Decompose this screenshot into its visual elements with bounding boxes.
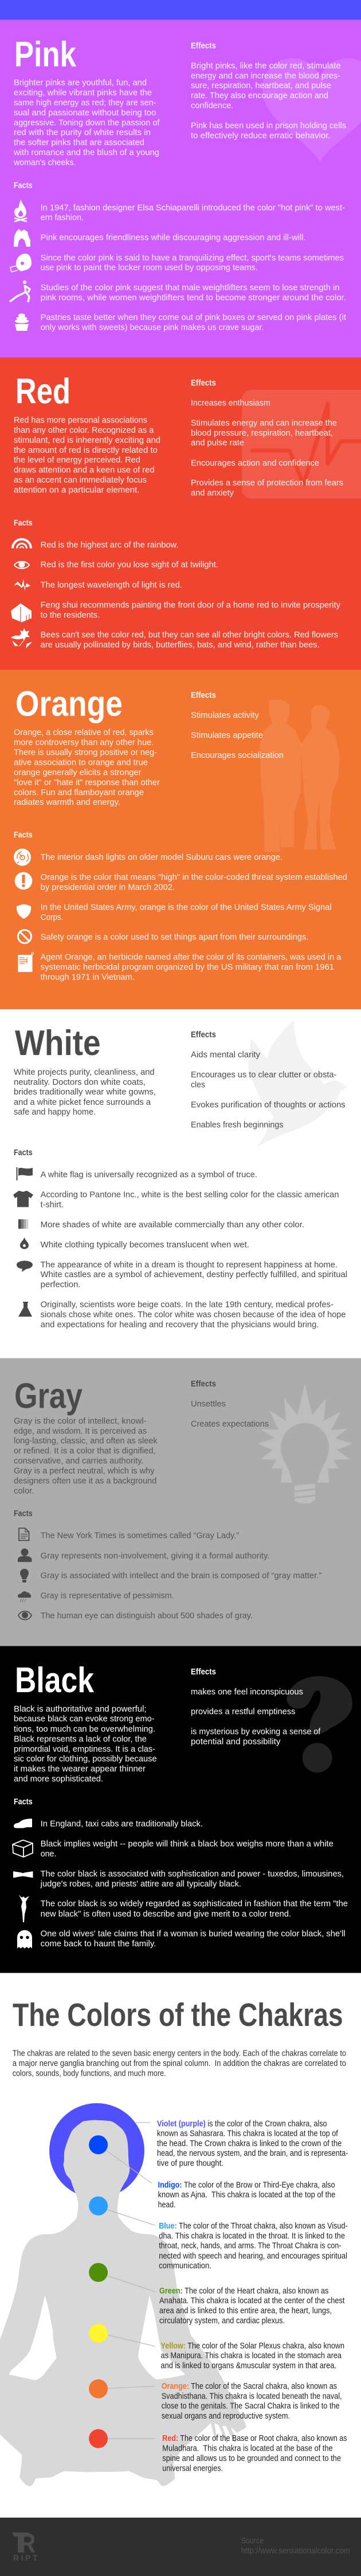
text: fact t-shirt: According to Pantone Inc., white is the best selling color for the classic american xyxy=(41,1190,339,1199)
leader lines xyxy=(107,2123,155,2439)
text: gray description: or refined. It is a color that is dignified, xyxy=(14,1447,156,1456)
panel: red xyxy=(0,357,361,670)
text: white description: safe and happy home. xyxy=(14,1108,96,1117)
text: pink description: red with the purity of white results in xyxy=(14,128,151,137)
text: fact taxi: In England, taxi cabs are traditionally black. xyxy=(41,1820,203,1829)
heading: gray effects: Effects xyxy=(191,1380,216,1389)
text: orange description: There is usually strong positive or neg- xyxy=(14,748,157,757)
text: gray description: designers often use it as a background xyxy=(14,1476,156,1485)
text: black effects: potential and possibility xyxy=(191,1737,281,1747)
text: chakra introduction xyxy=(13,2049,346,2078)
text: pink effects: energy and can increase the blood pres- xyxy=(191,72,340,81)
icon: box xyxy=(13,1840,33,1857)
text: gray description: color. xyxy=(14,1487,34,1496)
text: red description: than any other color. Recognized as a xyxy=(14,426,154,435)
text: fact black box xyxy=(41,1840,333,1859)
text: fact shades: More shades of white are available commercially than any other color. xyxy=(41,1220,304,1230)
heading: white effects: Effects xyxy=(191,1030,216,1040)
icon: person xyxy=(18,1548,32,1562)
heading: Gray: Gray xyxy=(14,1377,83,1416)
text: red chakra xyxy=(162,2434,347,2473)
heading: Red: Red xyxy=(15,372,70,412)
text: fact Agent Orange xyxy=(41,953,342,982)
text: white description: neutrality. Doctors don white coats, xyxy=(14,1078,146,1087)
text: pink description: sual and passionate without being too xyxy=(14,108,156,117)
text: pink description: exciting, while vibrant pinks have the xyxy=(14,89,152,98)
text: indigo chakra: known as Ajna. This chakra is located at the top of the xyxy=(158,2191,335,2200)
text: green chakra: circulatory system, and cardiac plexus. xyxy=(159,2317,285,2326)
text: fact army: Corps. xyxy=(41,913,63,922)
text: fact flag: A white flag is universally recognized as a symbol of truce. xyxy=(41,1171,257,1180)
chakra point: red xyxy=(89,2429,108,2448)
text: fact safety orange: Safety orange is a color used to set things apart from their surroundings. xyxy=(41,933,308,942)
chakra point: orange xyxy=(89,2379,108,2399)
text: fact army xyxy=(41,903,332,922)
text: white effects xyxy=(191,1050,346,1129)
icon: rainbow xyxy=(13,539,31,548)
text: black description: Black is authoritative and powerful; xyxy=(14,1705,147,1714)
text: orange effects: Stimulates activity xyxy=(191,711,260,720)
icon: water drop xyxy=(20,1238,29,1249)
text: fact authority: Gray represents non-involvement, giving it a formal authority. xyxy=(41,1551,269,1560)
icon: speech bubble xyxy=(17,1261,33,1272)
heading: Pink: Pink xyxy=(14,35,76,74)
icon: eye xyxy=(18,1611,32,1620)
panel: orange xyxy=(0,670,361,1009)
figure: meditating body silhouette xyxy=(0,2120,246,2486)
watermark: dove xyxy=(248,1020,348,1148)
text: pink description: with romance and the blush of a young xyxy=(13,148,159,157)
text: gray description: Gray is the color of intellect, knowl- xyxy=(14,1417,147,1426)
text: fact lab coats: and expectations for healing and recovery that the physicians would bring. xyxy=(41,1320,319,1329)
text: red description: attention on a particular element. xyxy=(14,485,140,495)
icon: light bulb xyxy=(20,1569,29,1582)
text: green chakra xyxy=(159,2286,345,2326)
text: fact friendliness: Pink encourages friendliness while discouraging aggression and ill-will. xyxy=(41,234,306,243)
chakra point: blue xyxy=(89,2196,108,2215)
logo: RIPT: RIPT xyxy=(13,2553,38,2562)
text: violet chakra: tive of pure thought. xyxy=(157,2159,223,2168)
text: fact feng shui: to the residents. xyxy=(41,611,100,620)
top band xyxy=(0,0,361,19)
text: indigo chakra: head. xyxy=(158,2200,176,2210)
icon: rain cloud xyxy=(18,1591,31,1602)
icon: flag xyxy=(16,1167,33,1180)
text: red effects: and anxiety xyxy=(191,489,234,498)
text: fact rainbow: Red is the highest arc of the rainbow. xyxy=(41,540,178,550)
heading: White: White xyxy=(15,1024,101,1063)
text: orange description: more controversy than any other hue. xyxy=(14,738,154,748)
text: fact bees: are usually pollinated by birds, butterflies, bats, and wind, rather than bees. xyxy=(41,641,320,650)
text: fact t-shirt: t-shirt. xyxy=(41,1200,64,1210)
text: chakra introduction: colors, sounds, body functions, and much more. xyxy=(13,2069,166,2078)
text: violet chakra: known as Sahasrara. This chakra is located at the top of xyxy=(157,2129,339,2138)
text: fact 500 shades: The human eye can distinguish about 500 shades of gray. xyxy=(41,1611,253,1621)
watermark: two children xyxy=(260,700,340,852)
text: orange chakra: close to the genitals. The Sacral Chakra is linked to the xyxy=(162,2402,340,2411)
icon: bow tie xyxy=(13,1871,33,1878)
text: pink effects: sure, respiration, heartbeat, and pulse xyxy=(191,81,331,90)
text: fact threat system xyxy=(41,873,347,892)
text: gray description xyxy=(14,1417,158,1496)
text: pink description: aggressive. Toning down the passion of xyxy=(14,118,160,128)
text: white effects: Evokes purification of thoughts or actions xyxy=(191,1101,346,1110)
heading: pink effects: Effects xyxy=(191,42,216,51)
icon: two people xyxy=(14,229,30,247)
text: fact sports teams: use pink to paint the locker room used by opposing teams. xyxy=(41,263,258,272)
icon: exclamation xyxy=(15,872,32,890)
text: orange description: colors. Fun and flamboyant orange xyxy=(14,788,144,797)
text: blue chakra: communication. xyxy=(159,2262,211,2271)
heading: red effects: Effects xyxy=(191,379,216,388)
text: red effects: Increases enthusiasm xyxy=(191,398,270,408)
icon: t-shirt xyxy=(13,1191,33,1207)
text: pink effects: rate. They also encourage action and xyxy=(191,92,328,101)
text: gray effects: Unsettles xyxy=(191,1400,226,1409)
footer xyxy=(0,2518,361,2576)
text: red chakra: spine and allows us to be grounded and connect to the xyxy=(162,2454,341,2463)
text: fact hot pink: ern fashion. xyxy=(41,214,84,223)
heading: orange facts: Facts xyxy=(14,831,33,840)
chakra point: indigo xyxy=(89,2135,108,2154)
panel: white xyxy=(0,1009,361,1358)
text: black effects: is mysterious by evoking a sense of xyxy=(191,1727,321,1736)
text: fact dream: perfection. xyxy=(41,1281,81,1290)
icon: prohibited sign xyxy=(18,930,31,943)
text: fact hot pink xyxy=(41,203,345,223)
text: orange chakra: sexual organs and reproductive system. xyxy=(162,2412,290,2421)
text: black description: it makes the wearer appear thinner xyxy=(14,1765,146,1774)
chakra point: green xyxy=(89,2263,108,2282)
icon: dashboard gauge xyxy=(14,848,31,866)
heading: white facts: Facts xyxy=(14,1148,33,1157)
icon: shade swatch xyxy=(18,1219,29,1228)
text: black description: tions, too much can be overwhelming. xyxy=(14,1725,155,1734)
watermark: heartbeat monitor xyxy=(242,390,361,499)
text: orange description: orange generally elicits a stronger xyxy=(14,768,142,777)
text: white effects: Encourages us to clear clutter or obsta- xyxy=(191,1070,337,1080)
text: orange description: Orange, a close relative of red, sparks xyxy=(14,728,154,737)
text: orange effects: Stimulates appetite xyxy=(191,731,263,740)
icon: wavelength xyxy=(14,579,30,591)
text: black effects: makes one feel inconspicuous xyxy=(191,1688,303,1697)
text: orange effects: Encourages socialization xyxy=(191,751,284,760)
panel: pink xyxy=(0,19,361,357)
text: yellow chakra xyxy=(160,2341,344,2370)
text: violet chakra xyxy=(157,2119,348,2168)
text: fact black box: Black implies weight -- people will think a black box weighs more than a white xyxy=(41,1840,333,1849)
text: red description: draws attention and a keen use of red xyxy=(14,466,155,475)
heading: gray facts: Facts xyxy=(14,1510,33,1519)
text: fact Agent Orange: through 1971 in Vietnam. xyxy=(41,973,135,982)
text: fact Suburu: The interior dash lights on older model Suburu cars were orange. xyxy=(41,853,282,862)
icon: flask xyxy=(18,1302,32,1317)
text: red description: stimulant, red is inherently exciting and xyxy=(14,436,160,445)
text: white effects: cles xyxy=(191,1081,205,1090)
panel: gray xyxy=(0,1358,361,1646)
text: fact t-shirt xyxy=(41,1190,339,1210)
text: indigo chakra xyxy=(158,2180,335,2210)
text: white description xyxy=(14,1068,156,1117)
text: fact weightlifters: pink rooms, while women weightlifters tend to become stronger around the color. xyxy=(41,293,346,302)
heading: black effects: Effects xyxy=(191,1668,216,1677)
text: green chakra: Green: The color of the Heart chakra, also known as xyxy=(159,2286,328,2296)
heading: pink facts: Facts xyxy=(14,181,33,191)
text: red chakra: Muladhara. This chakra is located at the base of the xyxy=(162,2444,333,2453)
text: red effects: and pulse rate xyxy=(191,438,244,448)
icon: document xyxy=(19,1528,29,1540)
text: white effects: Aids mental clarity xyxy=(191,1050,261,1060)
text: pink effects: Pink has been used in prison holding cells xyxy=(191,121,346,131)
text: black effects xyxy=(191,1688,321,1747)
text: gray description: Gray is a perfect neutral, which is why xyxy=(14,1467,155,1476)
text: pink description: Brighter pinks are youthful, fun, and xyxy=(14,78,147,88)
text: black description: because black can evoke strong emo- xyxy=(14,1714,155,1724)
text: pink effects: Bright pinks, like the color red, stimulate xyxy=(191,61,341,70)
text: fact lab coats: Originally, scientists wore beige coats. In the late 19th century, medical profes- xyxy=(41,1300,333,1309)
text: fact pastries xyxy=(41,313,346,333)
icon: container xyxy=(18,953,34,972)
text: fact wet clothing: White clothing typically becomes translucent when wet. xyxy=(41,1240,249,1250)
text: red description: as an accent can immediately focus xyxy=(14,476,147,485)
text: fact new black: new black" is often used to describe and give merit to a color trend. xyxy=(41,1910,291,1919)
heading: red facts: Facts xyxy=(14,519,33,528)
text: gray effects xyxy=(191,1400,269,1429)
text: fact wives tale xyxy=(41,1929,346,1949)
watermark: question mark xyxy=(287,1676,352,1773)
text: red effects xyxy=(191,398,343,498)
text: fact weightlifters: Studies of the color pink suggest that male weightlifters seem to lose strength in xyxy=(41,283,340,293)
text: green chakra: area and is linked to this entire area, the heart, lungs, xyxy=(159,2306,332,2316)
text: fact dream xyxy=(41,1261,347,1290)
text: fact lab coats: sionals chose white ones. The color white was chosen because of the idea of hope xyxy=(41,1310,346,1319)
text: fact sophistication: judge's robes, and priests' attire are all typically black. xyxy=(40,1880,241,1889)
icon: cupcake xyxy=(15,314,29,331)
text: fact New York Times: The New York Times is sometimes called “Gray Lady.” xyxy=(41,1531,239,1540)
text: pink effects: confidence. xyxy=(191,101,233,110)
icon: flower xyxy=(11,628,32,647)
heading: black facts: Facts xyxy=(14,1797,33,1807)
text: fact dream: White castles are a symbol of achievement, destiny perfectly fulfilled, and spiritual xyxy=(41,1270,347,1279)
text: pink description: woman's cheeks. xyxy=(13,158,76,167)
text: orange description: "love it" or "hate it" response than other xyxy=(14,778,160,787)
text: fact pastries: Pastries taste better when they come out of pink boxes or served on pink plates (it xyxy=(41,313,346,322)
text: fact pastries: only works with sweets) because pink makes us crave sugar. xyxy=(41,323,264,333)
text: fact threat system: by presidential order in March 2002. xyxy=(41,883,175,892)
text: fact new black: The color black is so widely regarded as sophisticated in fashion that the term "the xyxy=(41,1899,348,1909)
text: orange chakra xyxy=(162,2382,342,2421)
icon: eye xyxy=(14,561,29,568)
text: fact sophistication xyxy=(40,1870,344,1889)
text: black description: Black represents a lack of color, the xyxy=(14,1735,147,1744)
text: yellow chakra: as Manipura. This chakra is located in the stomach area xyxy=(160,2352,342,2361)
text: fact weightlifters xyxy=(41,283,346,302)
text: fact feng shui xyxy=(41,600,341,620)
text: red description: the level of energy perceived. Red xyxy=(14,456,140,465)
icon: woman silhouette xyxy=(19,1895,29,1922)
text: fact wavelength: The longest wavelength of light is red. xyxy=(41,580,182,590)
icon: stretching athlete xyxy=(10,280,30,302)
text: gray description: long-lasting, classic, and often as sleek xyxy=(14,1437,158,1446)
text: black effects: provides a restful emptiness xyxy=(191,1708,296,1717)
text: fact army: In the United States Army, orange is the color of the United States Army Signal xyxy=(41,903,332,912)
text: violet chakra: the head. The Crown chakra is linked to the crown of the xyxy=(157,2139,342,2148)
text: red description: Red has more personal associations xyxy=(14,416,147,425)
icon: house xyxy=(11,603,32,622)
text: pink description: same high energy as red; they are sen- xyxy=(14,98,156,108)
heading: Orange: Orange xyxy=(15,684,123,724)
text: orange effects xyxy=(191,711,284,760)
text: fact pessimism: Gray is representative of pessimism. xyxy=(41,1591,174,1601)
text: white description: White projects purity, cleanliness, and xyxy=(14,1068,155,1077)
text: blue chakra xyxy=(159,2222,348,2271)
heading: Black: Black xyxy=(15,1661,94,1700)
watermark: light bulb xyxy=(258,1384,352,1503)
text: fact sports teams xyxy=(41,254,344,272)
text: red effects: Stimulates energy and can increase the xyxy=(191,419,337,428)
text: fact bees xyxy=(41,631,338,650)
text: violet chakra: Violet (purple) is the color of the Crown chakra, also xyxy=(157,2119,327,2128)
watermark: heart xyxy=(262,58,361,161)
text: orange description xyxy=(14,728,160,807)
text: gray description: conservative, and carries authority. xyxy=(14,1457,143,1466)
text: fact twilight: Red is the first color you lose sight of at twilight. xyxy=(41,560,218,570)
text: red effects: blood pressure, respiration, heartbeat, xyxy=(191,429,333,438)
icon: campfire xyxy=(14,199,27,222)
text: fact Agent Orange: systematic herbicidal program organized by the US military that ran from 1961 xyxy=(41,963,334,972)
text: pink description xyxy=(13,78,160,167)
text: fact sophistication: The color black is associated with sophistication and power - tuxedos, limousines, xyxy=(41,1870,344,1879)
text: black description: sic color for clothing, possibly because xyxy=(14,1755,157,1764)
text: fact wives tale: One old wives' tale claims that if a woman is buried wearing the color black, she'll xyxy=(41,1929,346,1938)
text: white description: and a white picket fence surrounds a xyxy=(14,1098,151,1107)
text: fact new black xyxy=(41,1899,348,1919)
text: black description: primordial void, emptiness. It is a clas- xyxy=(14,1745,155,1754)
icon: football helmet xyxy=(10,254,32,272)
text: fact lab coats xyxy=(41,1300,346,1329)
text: red effects: Encourages action and confidence xyxy=(191,459,319,468)
panel: chakras xyxy=(0,1973,361,2518)
text: pink description: the softer pinks that are associated xyxy=(14,139,144,148)
text: black description: and more sophisticated. xyxy=(14,1775,103,1784)
text: fact wives tale: come back to haunt the family. xyxy=(41,1939,156,1949)
text: red description xyxy=(14,416,160,495)
text: fact gray matter: Gray is associated with intellect and the brain is composed of “gray matter.” xyxy=(41,1571,321,1581)
text: source: Source xyxy=(241,2537,264,2546)
logo: RIPT xyxy=(12,2528,38,2562)
text: fact Agent Orange: Agent Orange, an herbicide named after the color of its containers, was used in a xyxy=(41,953,342,962)
text: fact feng shui: Feng shui recommends painting the front door of a home red to invite prosperity xyxy=(41,600,341,610)
chakra point: yellow xyxy=(89,2324,108,2343)
text: fact black box: one. xyxy=(41,1850,56,1859)
icon: shield xyxy=(17,904,31,919)
text: orange description: radiates warmth and energy. xyxy=(14,798,120,807)
text: white description: brides traditionally wear white gowns, xyxy=(14,1088,156,1097)
heading: orange effects: Effects xyxy=(191,691,216,700)
icon: ghost xyxy=(17,1930,32,1949)
text: source xyxy=(241,2537,350,2556)
text: red description: the amount of red is directly related to xyxy=(14,446,158,455)
text: red effects: Provides a sense of protection from fears xyxy=(191,479,343,488)
icon: taxi xyxy=(14,1819,32,1828)
text: fact bees: Bees can't see the color red, but they can see all other bright colors. Red flowers xyxy=(41,631,338,640)
text: orange chakra: Orange: The color of the Sacral chakra, also known as xyxy=(162,2382,337,2391)
logo: RIPT: R xyxy=(19,2528,36,2559)
text: yellow chakra: and is linked to organs &muscular system in that area. xyxy=(160,2361,336,2370)
text: fact threat system: Orange is the color that means "high" in the color-coded threat system established xyxy=(41,873,347,882)
text: gray description: edge, and wisdom. It is perceived as xyxy=(14,1427,147,1436)
halo: crown chakra violet xyxy=(49,2103,144,2198)
text: pink effects xyxy=(191,61,346,140)
text: red chakra: universal energies. xyxy=(162,2464,223,2473)
text: orange description: ative association to orange and true xyxy=(14,758,148,768)
text: pink effects: to effectively reduce erratic behavior. xyxy=(191,131,331,140)
text: source: http://www.sensationalcolor.com xyxy=(241,2547,350,2556)
text: fact sports teams: Since the color pink is said to have a tranquilizing effect, sport's teams sometimes xyxy=(41,254,344,263)
text: white effects: Enables fresh beginnings xyxy=(191,1120,284,1129)
panel: black xyxy=(0,1646,361,1973)
text: black description xyxy=(14,1705,157,1784)
text: fact hot pink: In 1947, fashion designer Elsa Schiaparelli introduced the color "hot pink" to west- xyxy=(41,203,345,212)
text: indigo chakra: Indigo: The color of the Brow or Third-Eye chakra, also xyxy=(158,2180,335,2190)
text: gray effects: Creates expectations xyxy=(191,1420,269,1429)
text: fact dream: The appearance of white in a dream is thought to represent happiness at home. xyxy=(41,1261,338,1270)
